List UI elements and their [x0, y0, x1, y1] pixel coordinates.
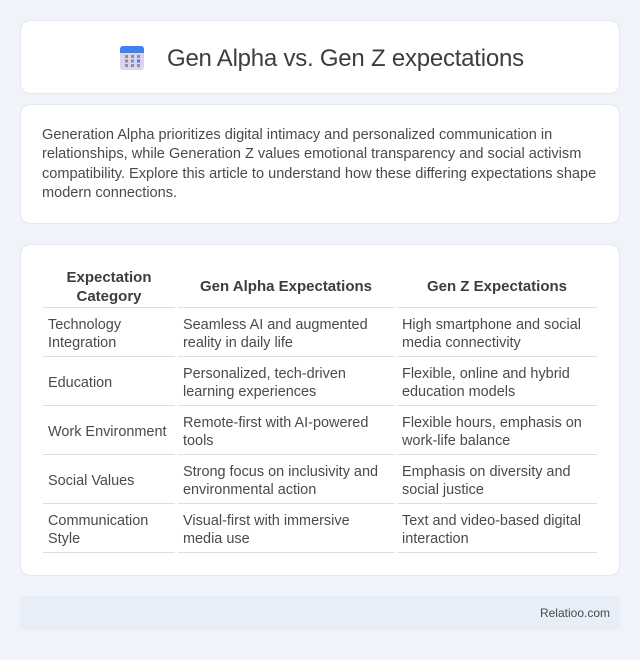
table header — [43, 269, 597, 308]
table: expectations comparison: Category — [76, 288, 142, 305]
icon: calendar — [120, 46, 144, 70]
table: expectations comparison: Work Environment — [48, 424, 166, 440]
table: expectations comparison: Style — [48, 531, 80, 547]
row: communication style — [43, 513, 597, 553]
table: expectations comparison: Emphasis on diversity and — [402, 464, 571, 480]
table: expectations comparison: education models — [402, 384, 515, 400]
table: expectations comparison: Seamless AI and augmented — [183, 317, 368, 333]
table: expectations comparison: Integration — [48, 335, 116, 351]
footer credit: Relatioo.com — [540, 606, 610, 620]
panel: comparison table — [20, 244, 620, 576]
intro text: modern connections. — [42, 185, 177, 201]
title: Gen Alpha vs. Gen Z expectations — [167, 45, 524, 72]
table: expectations comparison: Text and video-based digital — [402, 513, 581, 529]
table: expectations comparison: social justice — [402, 482, 484, 498]
table: expectations comparison: Gen Alpha Expectations — [200, 278, 372, 295]
row: education — [43, 366, 597, 406]
table: expectations comparison: Remote-first with AI-powered — [183, 415, 368, 431]
table: expectations comparison: interaction — [402, 531, 469, 547]
table: expectations comparison: work-life balance — [402, 433, 510, 449]
table: expectations comparison: media connectivity — [402, 335, 521, 351]
table: expectations comparison: environmental action — [183, 482, 316, 498]
table: expectations comparison: Communication — [48, 513, 148, 529]
intro text: compatibility. Explore this article to understand how these differing expectations shape — [42, 166, 596, 182]
table: expectations comparison: Flexible, online and hybrid — [402, 366, 570, 382]
table: expectations comparison: High smartphone and social — [402, 317, 581, 333]
intro text — [42, 127, 596, 201]
table: expectations comparison: learning experiences — [183, 384, 316, 400]
row: work environment — [43, 415, 597, 455]
intro text: Generation Alpha prioritizes digital intimacy and personalized communication in — [42, 127, 552, 143]
footer bar — [20, 596, 620, 630]
panel: introduction — [20, 104, 620, 224]
table: expectations comparison: Expectation — [66, 269, 152, 286]
table: expectations comparison: Flexible hours, emphasis on — [402, 415, 582, 431]
table: expectations comparison: Visual-first with immersive — [183, 513, 350, 529]
row: social values — [43, 464, 597, 504]
intro text: relationships, while Generation Z values emotional transparency and social activism — [42, 146, 581, 162]
table: expectations comparison: Gen Z Expectations — [427, 278, 567, 295]
table: expectations comparison: Technology — [48, 317, 121, 333]
table: expectations comparison: Social Values — [48, 473, 134, 489]
table: expectations comparison: Education — [48, 375, 112, 391]
table: expectations comparison: media use — [183, 531, 250, 547]
table: expectations comparison: Personalized, tech-driven — [183, 366, 346, 382]
table: expectations comparison: Strong focus on inclusivity and — [183, 464, 378, 480]
row: technology integration — [43, 317, 597, 357]
table: expectations comparison: reality in daily life — [183, 335, 293, 351]
panel: title card — [20, 20, 620, 94]
table: expectations comparison: tools — [183, 433, 214, 449]
